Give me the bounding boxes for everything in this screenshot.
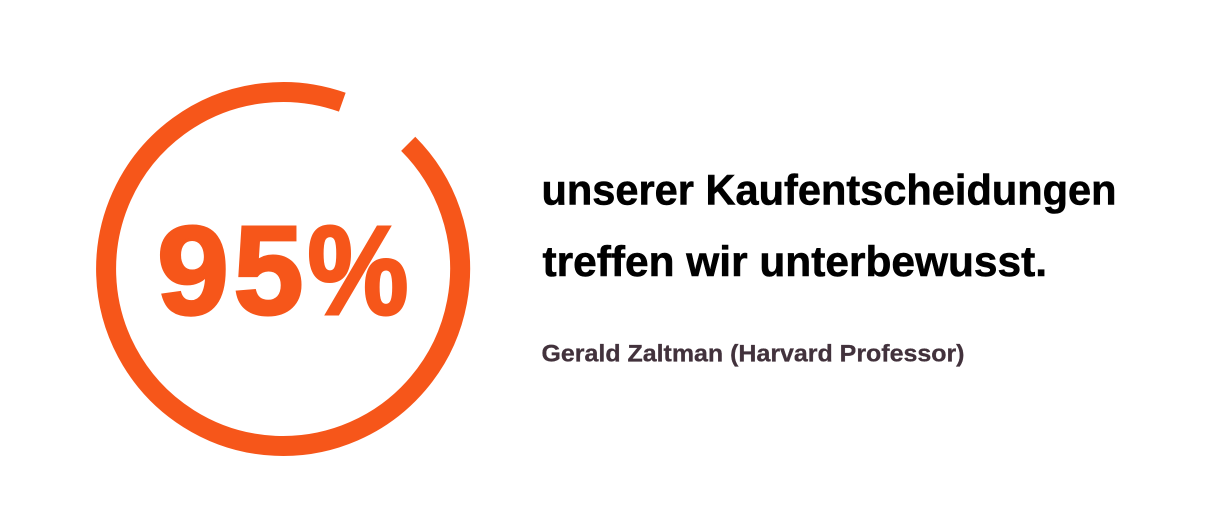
percentage figure (157, 200, 408, 341)
percentage figure: % (308, 200, 408, 341)
percentage figure: 5 (234, 200, 304, 341)
attribution: Gerald Zaltman (Harvard Professor) (542, 341, 964, 368)
statement line 1: unserer Kaufentscheidungen (542, 166, 1116, 214)
percentage figure: 9 (157, 200, 229, 341)
statement line 2: treffen wir unterbewusst. (542, 238, 1047, 286)
progress ring: 95 percent (106, 92, 460, 446)
